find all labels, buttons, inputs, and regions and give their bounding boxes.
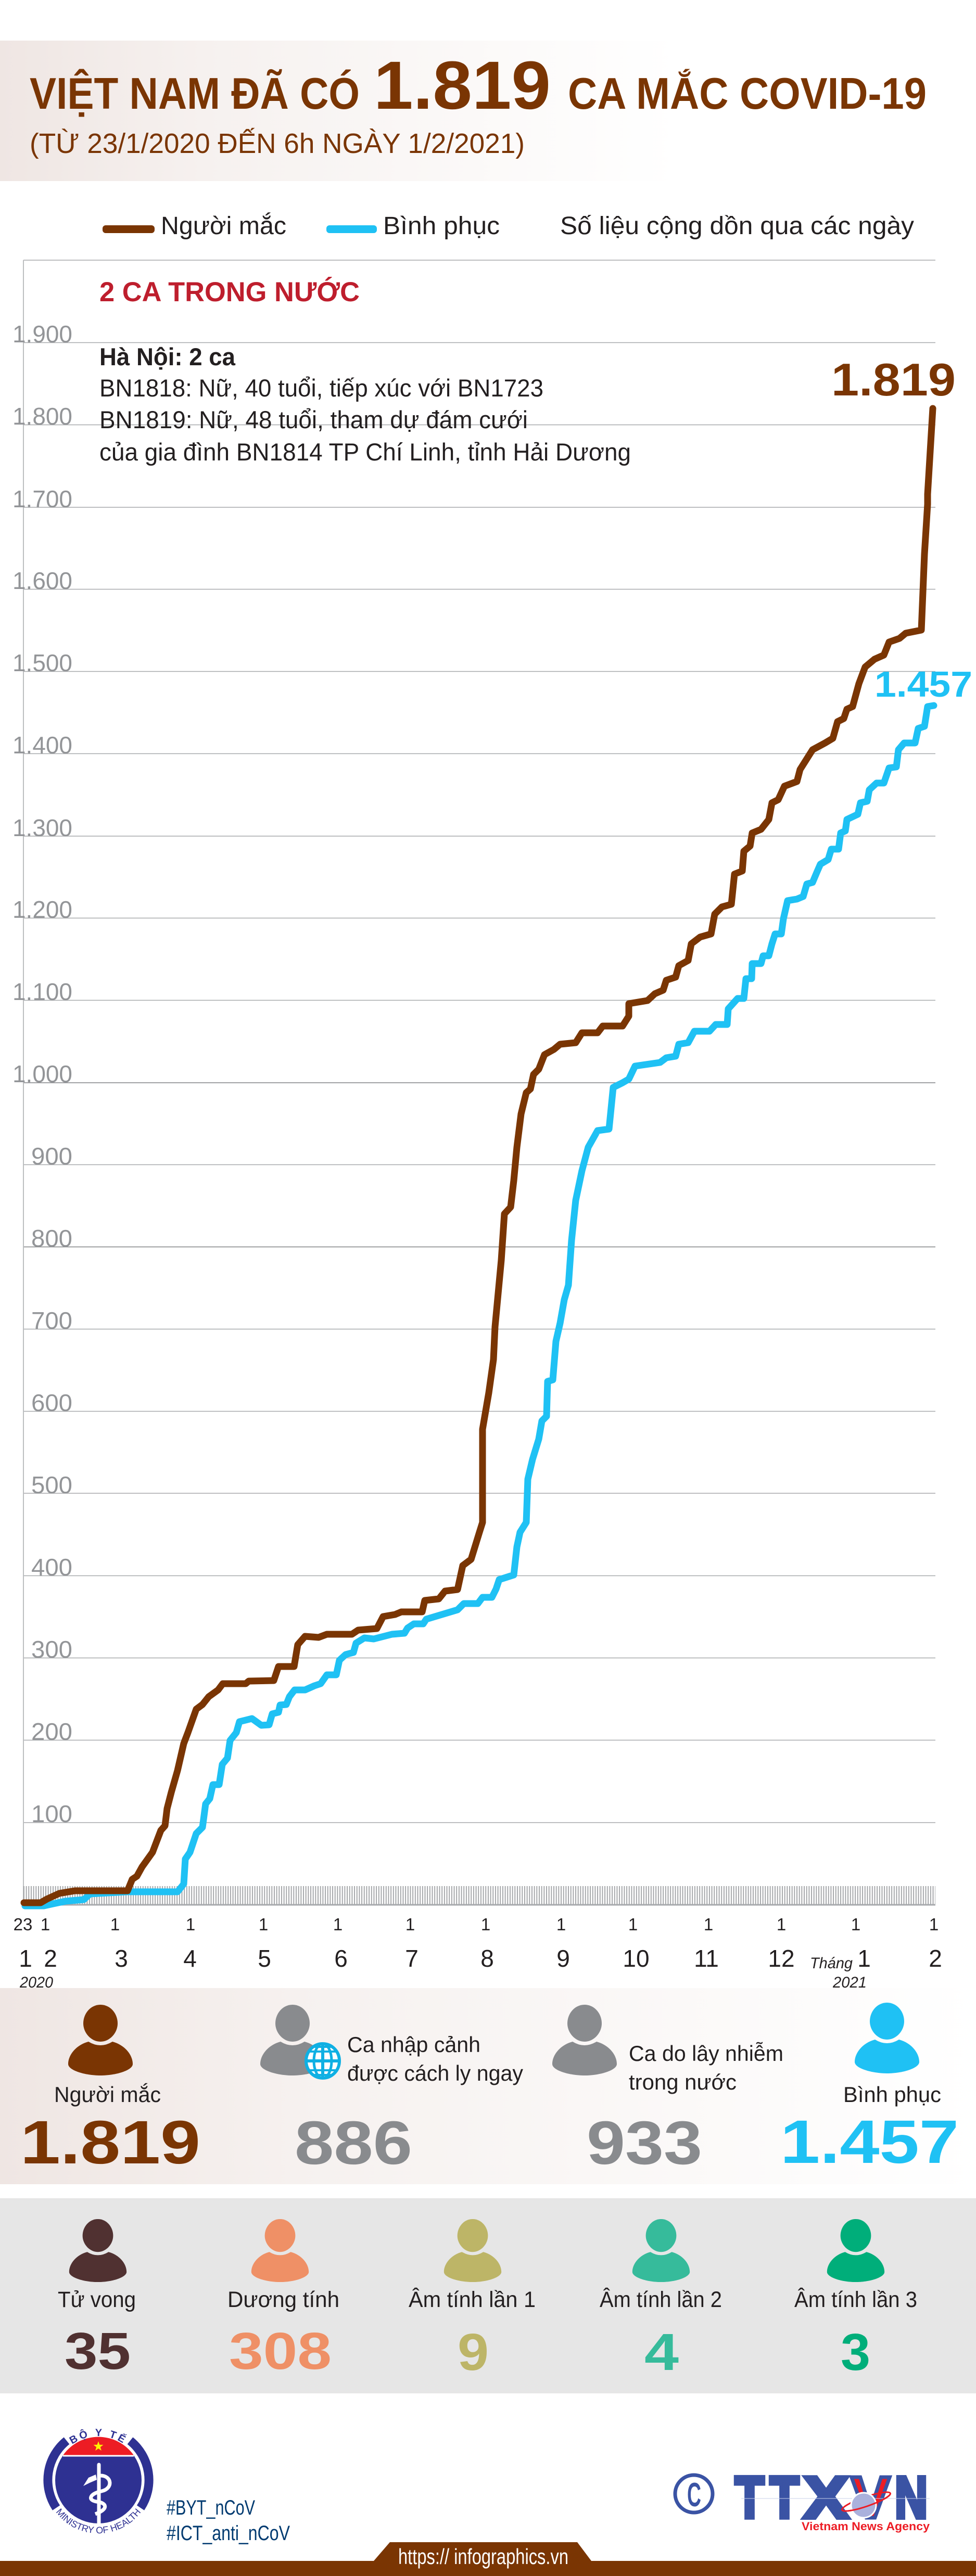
text block: case details: của gia đình BN1814 TP Chí Linh, tỉnh Hải Dương <box>99 438 631 466</box>
x axis day labels: 1 <box>851 1915 860 1934</box>
text block: case details: BN1819: Nữ, 48 tuổi, tham dự đám cưới <box>99 406 528 433</box>
x axis day labels: 1 <box>704 1915 713 1934</box>
y axis labels: 1.700 <box>12 485 72 512</box>
title <box>30 47 927 123</box>
y axis labels: 100 <box>31 1800 72 1827</box>
cases line <box>24 408 933 1903</box>
title: VIỆT NAM ĐÃ CÓ <box>30 69 360 119</box>
logo: TTXVN: C <box>687 2476 701 2514</box>
stat: negative three times: 3 <box>841 2323 870 2381</box>
x axis month labels <box>19 1945 942 1972</box>
x axis month labels: 4 <box>183 1945 197 1972</box>
stat: recovered: Bình phục <box>843 2082 941 2107</box>
stat: cases: Người mắc <box>54 2082 161 2107</box>
hashtags: #BYT_nCoV <box>167 2496 255 2519</box>
y axis labels: 1.300 <box>12 814 72 841</box>
legend: Số liệu cộng dồn qua các ngày <box>560 212 914 240</box>
stat: imported: được cách ly ngay <box>347 2061 523 2085</box>
x axis day labels: 1 <box>929 1915 939 1934</box>
text block: case details: BN1818: Nữ, 40 tuổi, tiếp xúc với BN1723 <box>99 374 543 402</box>
hashtags: #ICT_anti_nCoV <box>167 2522 290 2545</box>
stat: negative twice: 4 <box>644 2323 679 2381</box>
x axis month labels: 11 <box>694 1945 719 1972</box>
stat: domestic: Ca do lây nhiễm <box>629 2041 783 2066</box>
recovered line <box>25 706 934 1906</box>
line chart <box>12 260 972 1991</box>
stat: recovered: 1.457 <box>780 2108 959 2176</box>
logo: TTXVN: T <box>770 2465 799 2530</box>
stat: negative once: Âm tính lần 1 <box>409 2287 536 2312</box>
x axis year notes: 2021 <box>832 1974 867 1991</box>
stat: imported: Ca nhập cảnh <box>347 2032 480 2057</box>
x axis month labels: 2 <box>929 1945 942 1972</box>
value label: recovered: 1.457 <box>874 664 972 704</box>
stat: imported: 886 <box>295 2109 412 2177</box>
x axis day labels: 1 <box>481 1915 490 1934</box>
x axis month labels: 12 <box>768 1945 795 1972</box>
x axis month labels: 2 <box>44 1945 57 1972</box>
y axis labels: 200 <box>31 1718 72 1745</box>
y axis labels: 1.100 <box>12 978 72 1005</box>
logo: TTXVN: V <box>851 2465 890 2530</box>
website url: https:// infographics.vn <box>398 2544 568 2569</box>
value label: cases: 1.819 <box>831 354 956 405</box>
x axis day labels: 1 <box>628 1915 638 1934</box>
hashtags <box>167 2496 290 2545</box>
stat: negative once <box>409 2219 536 2381</box>
y axis labels: 1.500 <box>12 649 72 676</box>
y axis labels: 800 <box>31 1225 72 1252</box>
y axis labels <box>12 321 72 1827</box>
x axis month labels: 5 <box>258 1945 271 1972</box>
x axis month labels: 6 <box>334 1945 348 1972</box>
legend: Người mắc <box>161 212 286 240</box>
x axis day labels <box>14 1915 939 1934</box>
stat: domestic: trong nước <box>629 2070 737 2094</box>
logo: TTXVN: N <box>895 2465 928 2530</box>
x axis day labels: 1 <box>41 1915 50 1934</box>
stat: cases <box>20 2005 200 2177</box>
stat: negative twice <box>600 2219 722 2381</box>
y axis labels: 400 <box>31 1554 72 1581</box>
legend: Bình phục <box>383 212 500 240</box>
x axis day labels: 1 <box>186 1915 195 1934</box>
logo: TTXVN: Vietnam News Agency <box>802 2520 930 2533</box>
y axis labels: 300 <box>31 1636 72 1663</box>
stat: negative three times <box>794 2219 917 2381</box>
text block: case details: Hà Nội: 2 ca <box>99 343 236 370</box>
legend <box>103 212 914 240</box>
stat: domestic: 933 <box>587 2109 702 2177</box>
title: 1.819 <box>374 47 551 123</box>
x axis month labels: 8 <box>480 1945 494 1972</box>
logo: TTXVN: X <box>804 2465 848 2530</box>
logo: TTXVN: T <box>735 2465 764 2530</box>
y axis labels: 1.800 <box>12 403 72 430</box>
x axis month labels: 7 <box>405 1945 419 1972</box>
stat: deaths: Tử vong <box>58 2287 136 2312</box>
footer bar <box>0 2542 976 2576</box>
stat: domestic <box>552 2005 783 2177</box>
stat: positive: 308 <box>229 2322 332 2380</box>
stat: cases: 1.819 <box>20 2108 200 2177</box>
x axis day labels: 1 <box>405 1915 415 1934</box>
x axis day labels: 1 <box>110 1915 120 1934</box>
y axis labels: 1.200 <box>12 896 72 923</box>
x axis month labels: 10 <box>623 1945 650 1972</box>
y axis labels: 1.400 <box>12 732 72 759</box>
heading: domestic cases: 2 CA TRONG NƯỚC <box>99 276 360 307</box>
stat: negative once: 9 <box>458 2323 489 2381</box>
stat: negative three times: Âm tính lần 3 <box>794 2287 917 2312</box>
hatch band <box>23 1886 935 1905</box>
stat: positive <box>227 2219 339 2380</box>
stat: imported <box>260 2005 523 2177</box>
x axis year notes: Tháng <box>810 1955 853 1972</box>
x axis year notes <box>19 1955 867 1991</box>
y axis labels: 500 <box>31 1471 72 1498</box>
x axis day labels: 1 <box>777 1915 786 1934</box>
stat: negative twice: Âm tính lần 2 <box>600 2287 722 2312</box>
x axis month labels: 9 <box>556 1945 570 1972</box>
panel: title band <box>0 41 927 181</box>
panel: totals <box>0 1988 976 2184</box>
x axis day labels: 1 <box>556 1915 566 1934</box>
logo: ministry of health <box>43 2429 154 2534</box>
x axis day labels: 1 <box>259 1915 268 1934</box>
logo: ministry of health: MINISTRY OF HEALTH <box>56 2508 141 2534</box>
x axis day labels: 23 <box>14 1915 32 1934</box>
logo: ministry of health: BỘ Y TẾ <box>69 2429 127 2444</box>
y axis labels: 1.600 <box>12 567 72 594</box>
y axis labels: 700 <box>31 1307 72 1334</box>
x axis day labels: 1 <box>333 1915 343 1934</box>
icon: globe <box>306 2044 339 2078</box>
y axis labels: 1.900 <box>12 321 72 348</box>
title: CA MẮC COVID-19 <box>568 69 927 119</box>
panel: patient status <box>0 2198 976 2393</box>
stat: deaths: 35 <box>65 2322 131 2380</box>
logo: TTXVN <box>675 2465 930 2533</box>
y axis labels: 1.000 <box>12 1060 72 1087</box>
y axis labels: 900 <box>31 1143 72 1170</box>
stat: deaths <box>58 2219 136 2380</box>
x axis year notes: 2020 <box>19 1974 53 1991</box>
x axis month labels: 1 <box>857 1945 871 1972</box>
text block: case details <box>99 343 631 466</box>
x axis month labels: 1 <box>19 1945 32 1972</box>
y axis labels: 600 <box>31 1389 72 1416</box>
subtitle: (TỪ 23/1/2020 ĐẾN 6h NGÀY 1/2/2021) <box>30 128 525 159</box>
stat: recovered <box>780 2003 959 2176</box>
x axis month labels: 3 <box>115 1945 128 1972</box>
stat: positive: Dương tính <box>227 2287 339 2312</box>
